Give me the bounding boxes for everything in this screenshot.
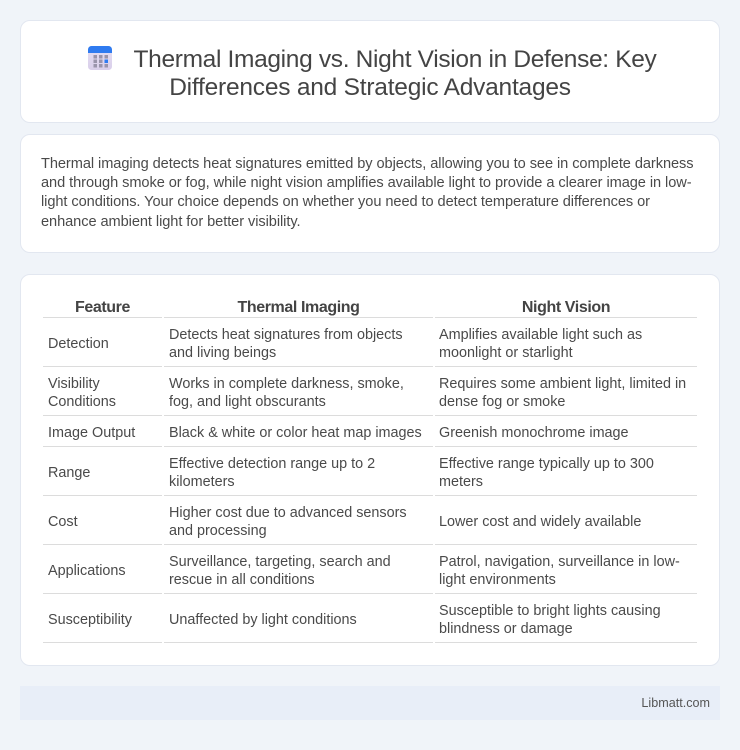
row: Visibility Conditions: Works in complete darkness, smoke, <box>169 376 404 392</box>
table header: Feature: Feature <box>75 299 130 316</box>
title: Thermal Imaging vs. Night Vision in Defense: Key <box>134 46 656 73</box>
row: Applications: light environments <box>439 572 556 588</box>
row: Range: kilometers <box>169 474 235 490</box>
row: Image Output: Black & white or color heat map images <box>169 425 422 441</box>
row: Applications: rescue in all conditions <box>169 572 315 588</box>
row: Detection: Detection <box>48 336 109 352</box>
row: Susceptibility <box>48 603 661 637</box>
title <box>134 46 657 101</box>
row: Detection: Amplifies available light such as <box>439 327 642 343</box>
panel: header <box>20 20 720 123</box>
table header: Thermal Imaging: Thermal Imaging <box>237 299 360 316</box>
row: Visibility Conditions <box>48 376 686 410</box>
row: Cost: Higher cost due to advanced sensors <box>169 505 407 521</box>
row: Visibility Conditions: dense fog or smoke <box>439 394 565 410</box>
row: Cost: Cost <box>48 514 78 530</box>
title: Differences and Strategic Advantages <box>169 74 571 101</box>
text block: description: enhance ambient light for better visibility. <box>41 214 300 230</box>
row: Cost <box>48 505 641 539</box>
row: Susceptibility: Susceptible to bright lights causing <box>439 603 661 619</box>
row: Detection: moonlight or starlight <box>439 345 573 361</box>
row: Detection <box>48 327 642 361</box>
icon: calendar <box>88 46 112 70</box>
row: Visibility Conditions: fog, and light obscurants <box>169 394 326 410</box>
row: Range: meters <box>439 474 483 490</box>
row: Visibility Conditions: Conditions <box>48 394 116 410</box>
row: Cost: Lower cost and widely available <box>439 514 641 530</box>
panel: comparison table <box>20 274 720 666</box>
row: Image Output: Greenish monochrome image <box>439 425 629 441</box>
row: Applications: Patrol, navigation, surveillance in low- <box>439 554 680 570</box>
row: Cost: and processing <box>169 523 267 539</box>
row: Detection: and living beings <box>169 345 276 361</box>
text block: description: and through smoke or fog, while night vision amplifies available light to provide a clearer image in low- <box>41 175 692 191</box>
row: Range: Range <box>48 465 90 481</box>
row: Range: Effective detection range up to 2 <box>169 456 375 472</box>
row: Applications: Applications <box>48 563 126 579</box>
footer <box>20 686 720 720</box>
row: Applications: Surveillance, targeting, search and <box>169 554 391 570</box>
row: Visibility Conditions: Visibility <box>48 376 100 392</box>
row: Image Output <box>48 425 629 441</box>
table header: Night Vision: Night Vision <box>522 299 610 316</box>
row: Range: Effective range typically up to 300 <box>439 456 654 472</box>
row: Image Output: Image Output <box>48 425 135 441</box>
panel: description <box>20 134 720 253</box>
row: Susceptibility: Susceptibility <box>48 612 132 628</box>
row: Range <box>48 456 654 490</box>
text block: description: light conditions. Your choice depends on whether you need to detect temperature differences or <box>41 194 650 210</box>
footer: Libmatt.com <box>641 696 710 710</box>
row: Susceptibility: blindness or damage <box>439 621 573 637</box>
text block: description <box>41 156 694 230</box>
row: Visibility Conditions: Requires some ambient light, limited in <box>439 376 686 392</box>
row: Detection: Detects heat signatures from objects <box>169 327 403 343</box>
row: Applications <box>48 554 680 588</box>
text block: description: Thermal imaging detects heat signatures emitted by objects, allowing you to see in complete darkness <box>41 156 694 172</box>
row: Susceptibility: Unaffected by light conditions <box>169 612 357 628</box>
